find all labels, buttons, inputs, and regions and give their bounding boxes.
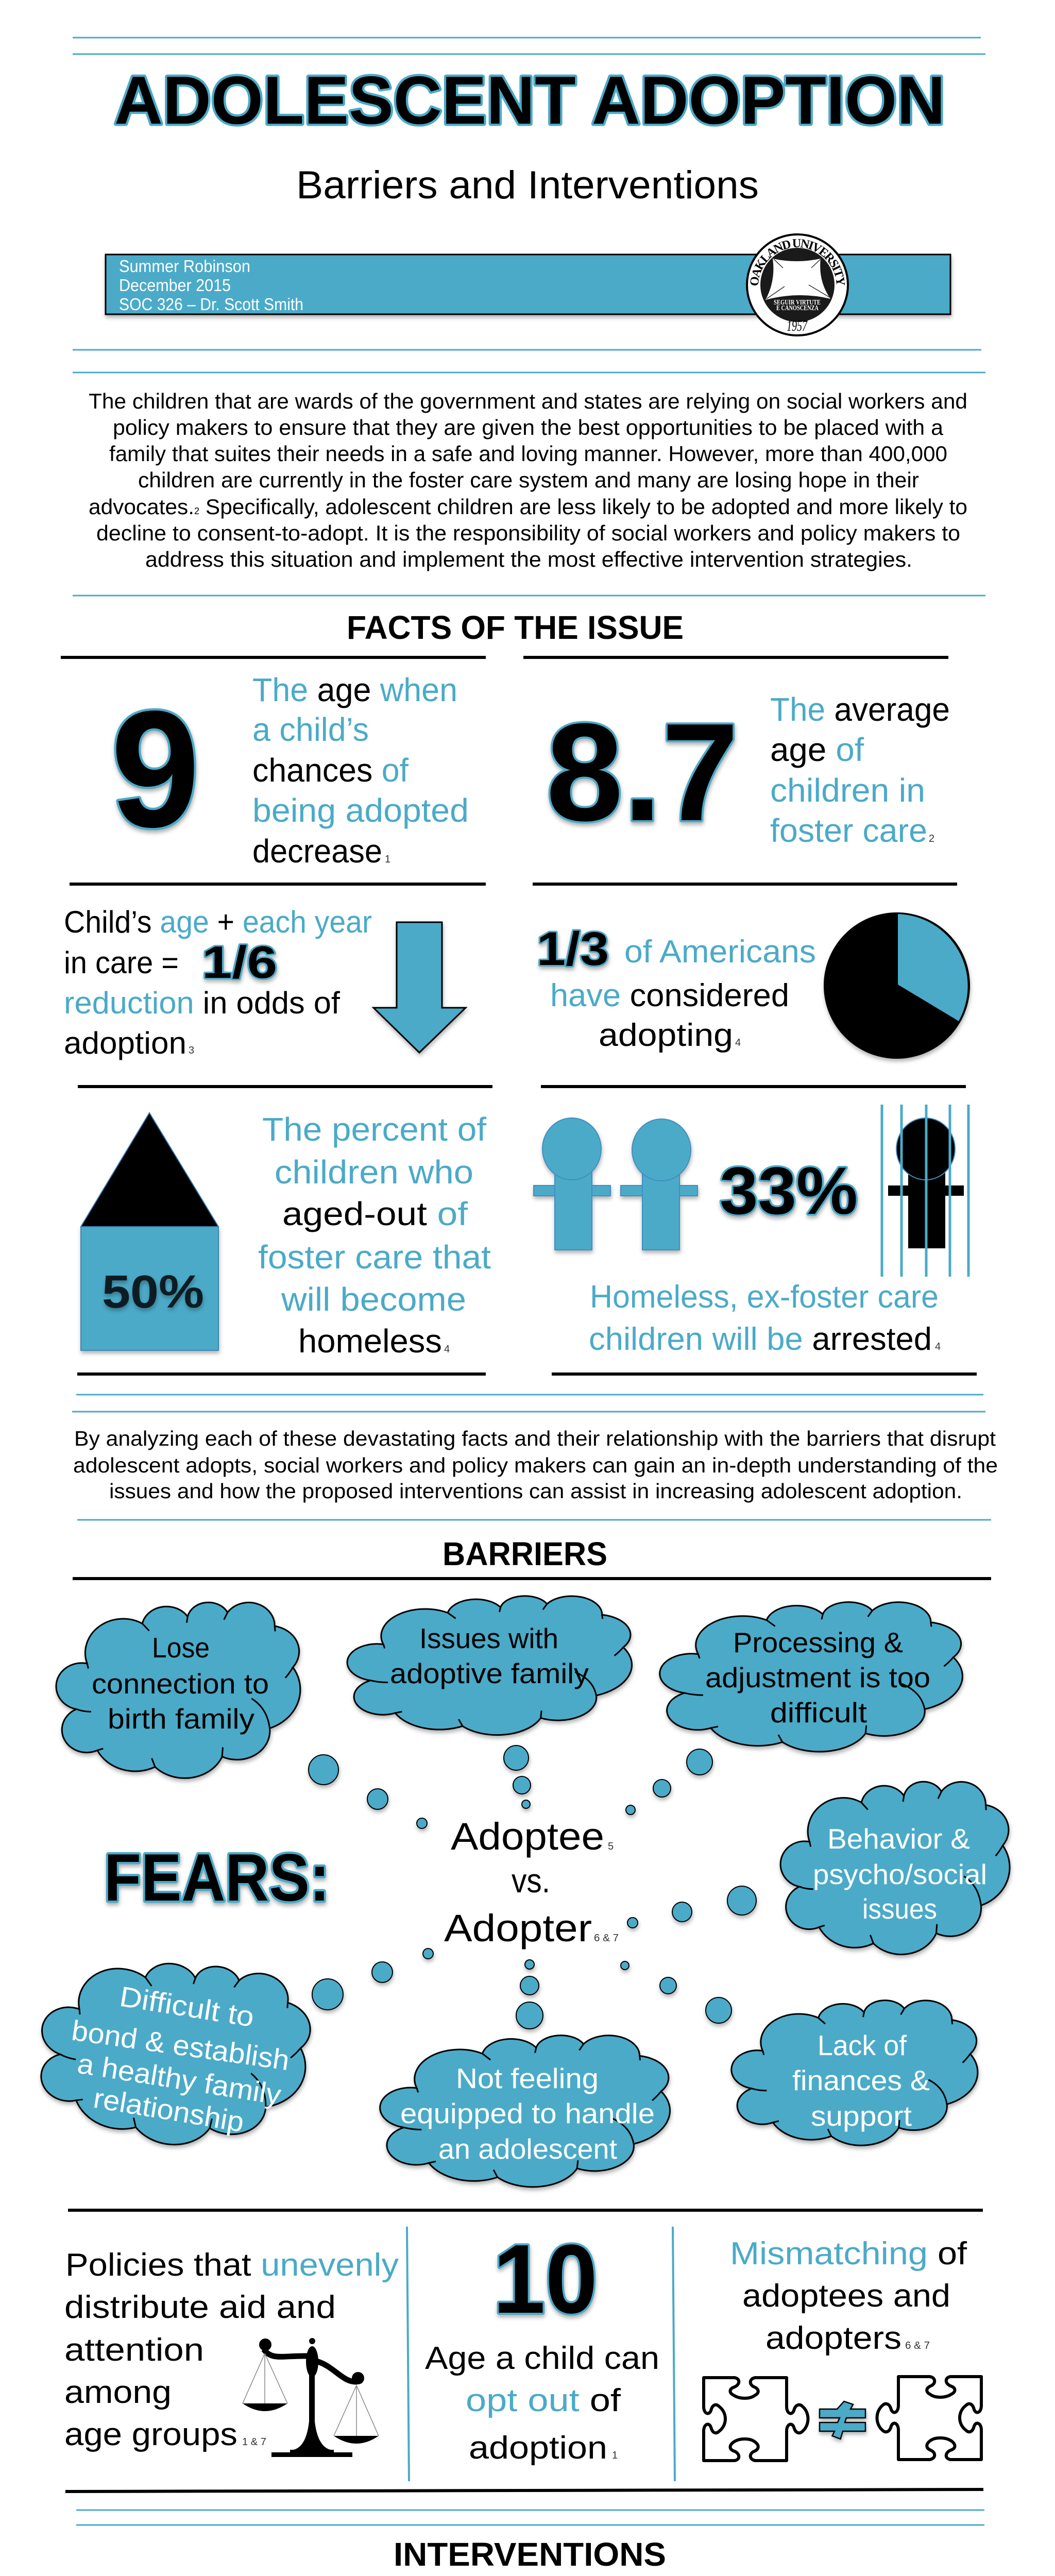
fact: 1/6 reduction [64,905,372,1060]
heading: facts of the issue: FACTS OF THE ISSUE [347,609,684,646]
intro paragraph [89,389,967,571]
barrier: mismatching: 6 & 7 [905,2340,930,2351]
intro paragraph: family that suites their needs in a safe and loving manner. However, more than 400,000 [109,442,947,466]
fact: age 9: 1 [385,854,390,865]
intro paragraph: decline to consent-to-adopt. It is the responsibility of social workers and policy makers to [96,521,960,545]
barrier: age 10: 1 [612,2450,618,2461]
author banner: December 2015 [119,276,231,295]
bridging paragraph [73,1427,998,1503]
icon: house 50% [81,1113,218,1350]
barrier: uneven policies: Policies that unevenly [65,2247,399,2283]
fact: average age 8.7: 8.7 [546,695,739,850]
cloud: difficult to bond: bond & establish [70,2014,292,2076]
fact: aged out homeless: foster care that [258,1239,491,1276]
icon: unbalanced scale [243,2338,379,2457]
heading: barriers: BARRIERS [443,1535,607,1572]
barrier: uneven policies: age groups [64,2417,237,2452]
centre: adoptee vs adopter: vs. [512,1861,550,1900]
fact: homeless arrested [589,1279,941,1357]
cloud: lose connection: connection to [92,1668,269,1700]
fact: age 9 [111,671,469,870]
icon: Oakland University seal: OAKLAND UNIVERSITY [750,239,845,285]
heading: interventions: INTERVENTIONS [394,2536,666,2573]
icon: Oakland University seal [746,233,849,336]
cloud: issues with adoptive family [347,1596,632,1735]
intro paragraph: address this situation and implement the most effective intervention strategies. [145,547,912,571]
cloud: processing and adjustment: Processing & [733,1626,903,1658]
cloud: lack of finances: Lack of [818,2029,907,2061]
subtitle: Barriers and Interventions [296,163,759,207]
intro paragraph: policy makers to ensure that they are given the best opportunities to be placed with a [113,415,944,439]
barrier: uneven policies: distribute aid and [64,2290,336,2325]
fact: average age 8.7: 2 [929,833,934,844]
author banner: Summer Robinson [119,257,250,276]
cloud: behavior issues [780,1782,1010,1955]
barrier: uneven policies [64,2247,399,2452]
fact: aged out homeless: The percent of [262,1111,486,1148]
centre: adoptee vs adopter: Adoptee [451,1815,604,1858]
fact: 1/6 reduction: 1/6 [202,937,277,988]
cloud: not feeling equipped: an adolescent [438,2133,617,2165]
icon: mismatched puzzle pieces [704,2377,981,2461]
cloud: not feeling equipped [380,2036,670,2187]
fact: 1/3 of Americans: adopting [599,1018,733,1053]
fact: aged out homeless: homeless [298,1323,442,1360]
bridging paragraph: adolescent adopts, social workers and policy makers can gain an in-depth understanding of the [73,1453,998,1477]
fact: average age 8.7: The average [770,691,950,728]
barrier: age 10 [425,2225,659,2466]
barrier: mismatching: adopters [765,2320,901,2356]
fact: aged out homeless: children who [275,1154,473,1191]
cloud: lose connection: Lose [152,1632,210,1664]
bridging paragraph: issues and how the proposed interventions can assist in increasing adolescent adoption. [109,1479,962,1503]
thought bubbles [309,1745,756,2029]
centre: adoptee vs adopter: 5 [608,1841,614,1852]
cloud: behavior issues: psycho/social [813,1858,987,1890]
icon: Oakland University seal: E CANOSCENZA [776,304,819,312]
cloud: issues with adoptive family: adoptive family [390,1657,589,1689]
fact: aged out homeless: will become [281,1281,466,1318]
cloud: difficult to bond: relationship [91,2082,246,2138]
intro paragraph: children are currently in the foster care system and many are losing hope in their [138,468,919,492]
fact: 1/3 of Americans [537,923,816,1053]
barrier: uneven policies: 1 & 7 [242,2436,266,2448]
barrier: age 10: Age a child can [425,2341,659,2376]
barrier: age 10: adoption [469,2430,607,2466]
fact: age 9: decrease [252,833,382,870]
fact: 1/3 of Americans: have considered [550,978,789,1013]
fact: homeless arrested: Homeless, ex-foster care [590,1279,939,1315]
fact: age 9: chances of [252,752,409,789]
fact: average age 8.7 [546,691,950,850]
bridging paragraph: By analyzing each of these devastating facts and their relationship with the barriers that disrupt [74,1427,996,1450]
fact: average age 8.7: foster care [770,812,927,849]
barrier: mismatching: adoptees and [742,2278,950,2314]
icon: two teal people [534,1118,697,1250]
cloud: not feeling equipped: equipped to handle [400,2097,655,2129]
stat: 33%: 33% [720,1153,858,1228]
fact: age 9: The age when [252,671,457,708]
barrier: mismatching [730,2236,967,2356]
pie chart [824,912,970,1059]
icon: Oakland University seal: 1957 [787,317,808,334]
barrier: age 10: opt out of [466,2383,621,2418]
centre: adoptee vs adopter: 6 & 7 [594,1933,619,1944]
icon: down arrow [373,922,466,1053]
barrier: uneven policies: attention [64,2332,204,2368]
fact: 1/3 of Americans: of Americans [624,934,816,970]
fact: 1/6 reduction: 3 [189,1045,194,1056]
centre: adoptee vs adopter [444,1815,619,1950]
fact: homeless arrested: children will be arrested [589,1321,932,1357]
fact: average age 8.7: age of [770,731,864,768]
cloud: processing and adjustment: adjustment is too [705,1662,930,1693]
author banner [106,255,950,314]
fact: aged out homeless: aged-out of [282,1195,468,1232]
fact: 1/3 of Americans: 1/3 [537,923,609,975]
cloud: behavior issues: Behavior & [827,1823,970,1855]
cloud: behavior issues: issues [862,1893,937,1925]
cloud: processing and adjustment [660,1602,962,1752]
fact: aged out homeless: 4 [444,1344,450,1355]
fact: 1/6 reduction: adoption [64,1026,186,1060]
cloud: lack of finances [731,2001,978,2145]
icon: Oakland University seal: SEGUIR VIRTUTE [774,299,821,307]
intro paragraph: The children that are wards of the government and states are relying on social workers and [89,389,967,413]
fact: age 9: being adopted [252,792,469,829]
fact: age 9: a child’s [252,711,369,748]
cloud: lack of finances: finances & [792,2064,930,2096]
author banner: SOC 326 – Dr. Scott Smith [119,295,303,314]
barrier: mismatching: Mismatching of [730,2236,967,2272]
fact: average age 8.7: children in [770,772,925,809]
cloud: difficult to bond [27,1941,319,2164]
fact: 1/6 reduction: in care = [64,945,179,980]
fact: aged out homeless [258,1111,491,1360]
cloud: issues with adoptive family: Issues with [419,1622,558,1654]
fact: 1/6 reduction: Child’s age + each year [64,905,372,939]
cloud: difficult to bond: a healthy family [75,2047,283,2111]
cloud: difficult to bond: Difficult to [117,1980,257,2033]
label: fears: FEARS: [104,1840,330,1915]
icon: house 50%: 50% [102,1266,204,1318]
barrier: uneven policies: among [64,2375,172,2410]
cloud: lose connection [56,1602,300,1778]
fact: 1/6 reduction: reduction in odds of [64,986,340,1020]
fact: 1/3 of Americans: 4 [735,1037,741,1048]
intro paragraph: advocates.2 Specifically, adolescent children are less likely to be adopted and more likely to [89,495,967,519]
cloud: processing and adjustment: difficult [770,1697,867,1728]
barrier: age 10: 10 [493,2225,598,2334]
centre: adoptee vs adopter: Adopter [444,1907,592,1950]
title: ADOLESCENT ADOPTION [114,62,945,138]
cloud: not feeling equipped: Not feeling [456,2062,599,2094]
fact: age 9: 9 [111,677,200,862]
cloud: lose connection: birth family [108,1703,255,1735]
cloud: lack of finances: support [811,2100,912,2132]
fact: homeless arrested: 4 [935,1341,941,1352]
icon: person behind bars [882,1105,968,1277]
